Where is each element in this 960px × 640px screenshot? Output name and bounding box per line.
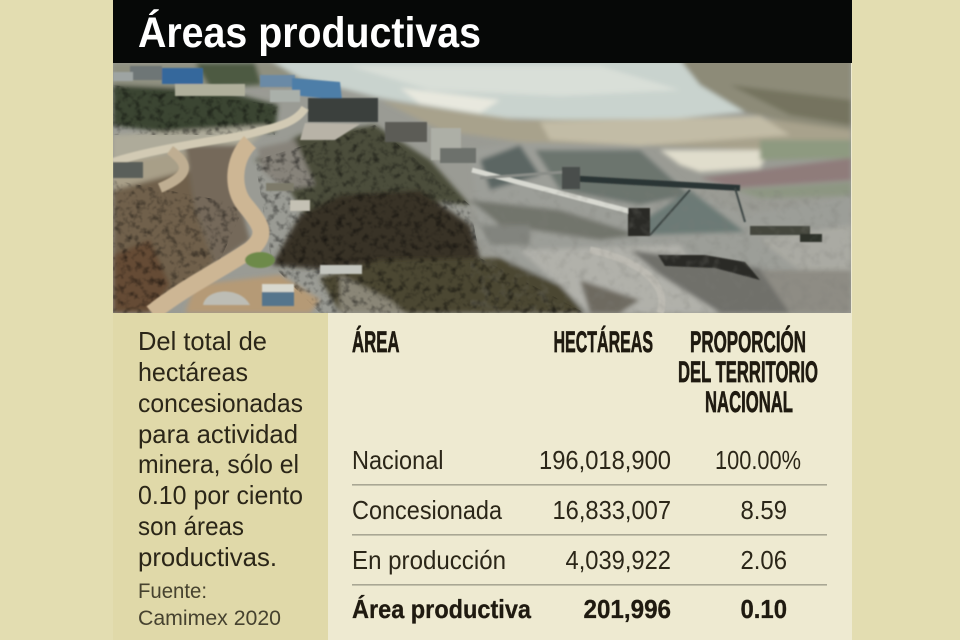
card panel	[113, 0, 852, 640]
row: Nacional: 100.00%	[715, 445, 801, 475]
row: En producción: En producción	[352, 545, 506, 575]
title: Áreas productivas	[138, 9, 481, 57]
roads	[113, 108, 305, 162]
source note	[138, 580, 281, 630]
summary text	[138, 326, 303, 572]
summary text: son áreas	[138, 511, 244, 541]
row: Concesionada: Concesionada	[352, 495, 502, 525]
row: Nacional: 196,018,900	[539, 445, 671, 475]
row: Área productiva: 0.10	[740, 594, 787, 624]
machinery	[628, 208, 650, 236]
row: Nacional	[352, 445, 801, 475]
row: Área productiva: Área productiva	[352, 594, 531, 624]
photo: open-pit mine landscape	[113, 60, 851, 313]
table header: NACIONAL	[705, 386, 793, 419]
row: Concesionada: 16,833,007	[552, 495, 671, 525]
quarry texture	[470, 190, 851, 313]
row: Área productiva	[352, 594, 787, 624]
summary text: productivas.	[138, 542, 277, 572]
summary text: concesionadas	[138, 388, 303, 418]
hill mottling	[113, 85, 582, 313]
table header: HECTÁREAS	[554, 325, 653, 359]
row: En producción	[352, 545, 787, 575]
table header: DEL TERRITORIO	[678, 356, 818, 389]
buildings top left	[130, 66, 162, 80]
source note: Fuente:	[138, 580, 207, 603]
title bar	[113, 0, 852, 63]
table header: ÁREA	[352, 325, 400, 359]
table header: PROPORCIÓN	[690, 325, 806, 359]
summary text: 0.10 por ciento	[138, 480, 303, 510]
summary text: para actividad	[138, 419, 298, 449]
conveyors	[472, 170, 640, 214]
row: Concesionada	[352, 495, 787, 525]
summary text: minera, sólo el	[138, 449, 299, 479]
summary text: Del total de	[138, 326, 267, 356]
central plant	[260, 75, 295, 87]
row: En producción: 2.06	[740, 545, 787, 575]
row: En producción: 4,039,922	[566, 545, 671, 575]
table header	[352, 325, 818, 419]
dark pile edges	[658, 255, 760, 280]
row: Concesionada: 8.59	[740, 495, 787, 525]
row: Área productiva: 201,996	[584, 594, 671, 624]
data table	[352, 325, 827, 624]
row: Nacional: Nacional	[352, 445, 444, 475]
source note: Camimex 2020	[138, 607, 281, 630]
site buildings	[113, 162, 143, 178]
summary text: hectáreas	[138, 357, 248, 387]
summary sidebar	[113, 313, 328, 640]
